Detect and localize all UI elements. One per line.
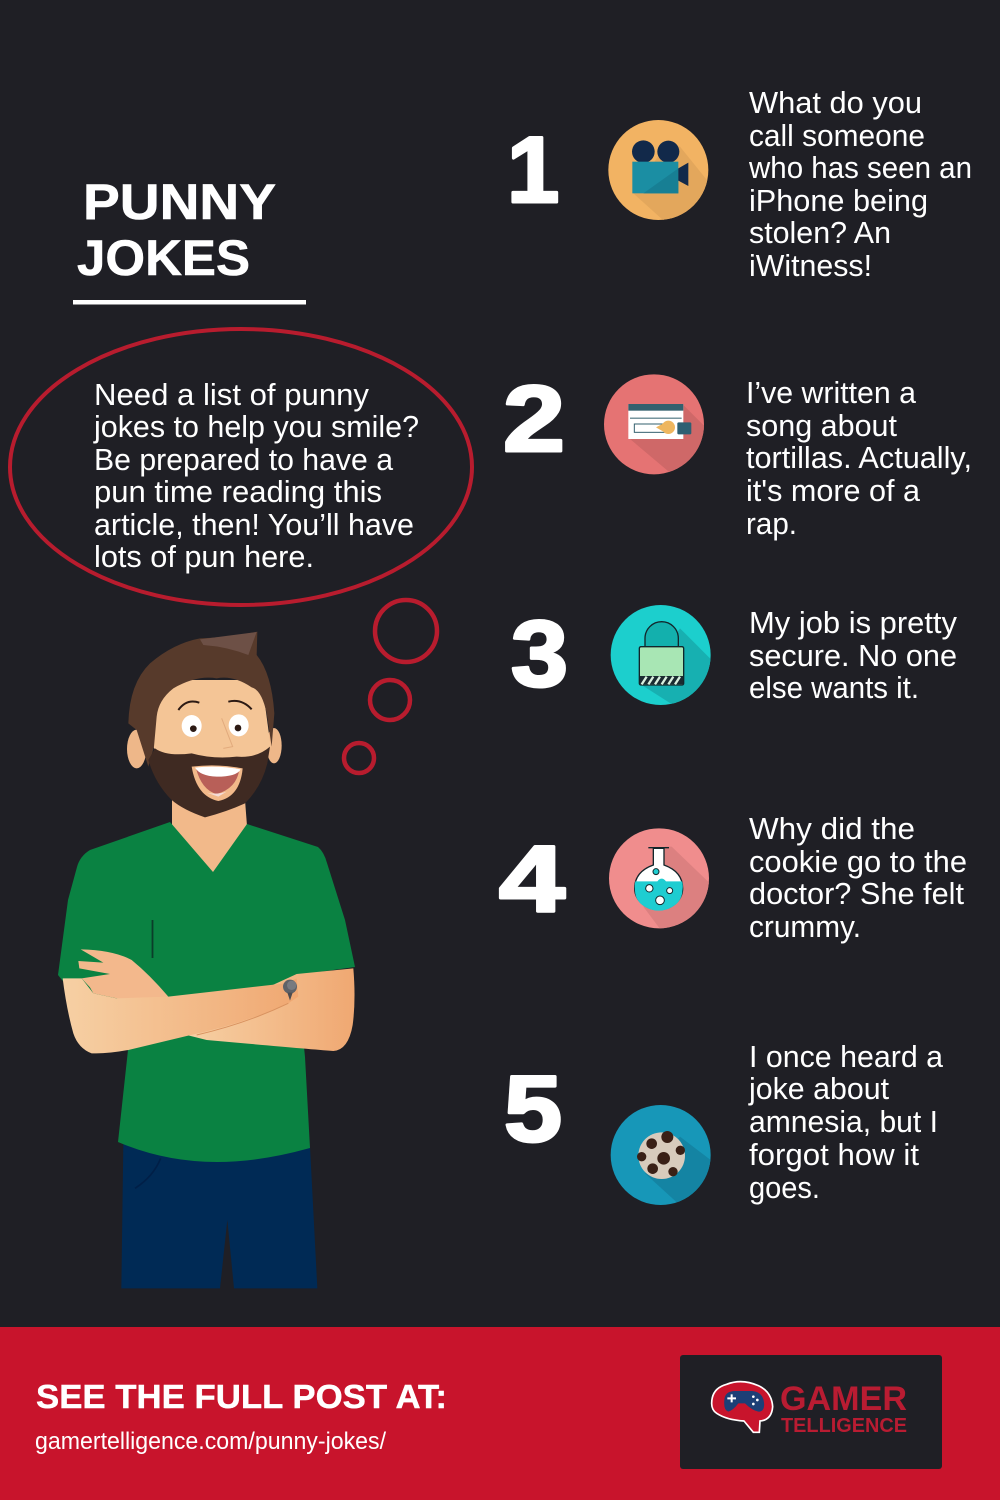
- footer band: [0, 1327, 1000, 1500]
- logo box: [680, 1355, 942, 1469]
- logo wordmark: GAMER: [780, 1380, 907, 1418]
- joke text: [749, 811, 967, 944]
- shirt pocket seam: [152, 920, 154, 958]
- joke text: crummy.: [749, 909, 861, 944]
- neck: [172, 800, 247, 874]
- icon: cookie: [611, 1105, 715, 1208]
- shirt: [58, 822, 355, 1162]
- joke text: iWitness!: [749, 248, 872, 283]
- logo box: TELLIGENCE: [781, 1415, 907, 1437]
- joke text: tortillas. Actually,: [746, 440, 972, 475]
- joke text: cookie go to the: [749, 844, 967, 879]
- joke text: joke about: [748, 1071, 889, 1106]
- thought bubble with intro text: Be prepared to have a: [94, 442, 394, 477]
- title: PUNNY: [83, 174, 276, 230]
- joke text: call someone: [749, 118, 925, 153]
- joke text: My job is pretty: [749, 605, 957, 640]
- joke text: song about: [746, 408, 897, 443]
- thought bubble with intro text: article, then! You’ll have: [94, 507, 414, 542]
- thought bubble with intro text: jokes to help you smile?: [93, 409, 419, 444]
- icon: flask: [609, 828, 713, 933]
- footer url: gamertelligence.com/punny-jokes/: [35, 1428, 386, 1455]
- joke 5: [504, 1039, 944, 1208]
- number 4: 4: [499, 826, 565, 931]
- thought bubble with intro text: Need a list of punny: [94, 377, 369, 412]
- joke text: amnesia, but I: [749, 1104, 938, 1139]
- joke text: goes.: [749, 1170, 820, 1205]
- number 2: 2: [503, 366, 565, 471]
- joke 4: [499, 811, 967, 944]
- joke text: [748, 85, 972, 283]
- icon: brain with game controller: [712, 1382, 773, 1432]
- icon: film camera: [608, 120, 715, 223]
- trousers: [121, 1143, 317, 1288]
- icon: padlock: [611, 605, 715, 708]
- joke text: iPhone being: [749, 183, 928, 218]
- character: smiling bearded man: [58, 632, 355, 1288]
- head: [127, 632, 282, 817]
- joke text: stolen? An: [749, 215, 891, 250]
- joke text: else wants it.: [749, 670, 919, 705]
- joke text: forgot how it: [749, 1137, 919, 1172]
- joke text: What do you: [749, 85, 922, 120]
- joke text: doctor? She felt: [749, 876, 964, 911]
- thought bubble trail circles: [344, 600, 437, 773]
- number 1: 1: [507, 117, 559, 222]
- joke text: Why did the: [749, 811, 915, 846]
- joke text: I once heard a: [749, 1039, 944, 1074]
- joke text: it's more of a: [746, 473, 921, 508]
- title: [73, 174, 306, 304]
- thought bubble with intro text: lots of pun here.: [94, 539, 314, 574]
- footer call to action: SEE THE FULL POST AT:: [36, 1378, 447, 1415]
- joke 2: [503, 366, 972, 541]
- joke text: [749, 605, 957, 705]
- thought bubble with intro text: pun time reading this: [94, 474, 382, 509]
- joke text: who has seen an: [748, 150, 972, 185]
- number 3: 3: [511, 601, 568, 706]
- joke text: secure. No one: [749, 638, 957, 673]
- icon: card and key: [604, 374, 710, 478]
- joke 1: [507, 85, 972, 283]
- crossed arms: [63, 949, 355, 1053]
- number 5: 5: [504, 1056, 562, 1161]
- joke text: rap.: [746, 506, 797, 541]
- joke 3: [511, 601, 957, 708]
- thought bubble with intro text: [10, 329, 472, 605]
- joke text: I’ve written a: [746, 375, 917, 410]
- joke text: [746, 375, 972, 541]
- joke text: [748, 1039, 944, 1205]
- title: JOKES: [77, 230, 250, 286]
